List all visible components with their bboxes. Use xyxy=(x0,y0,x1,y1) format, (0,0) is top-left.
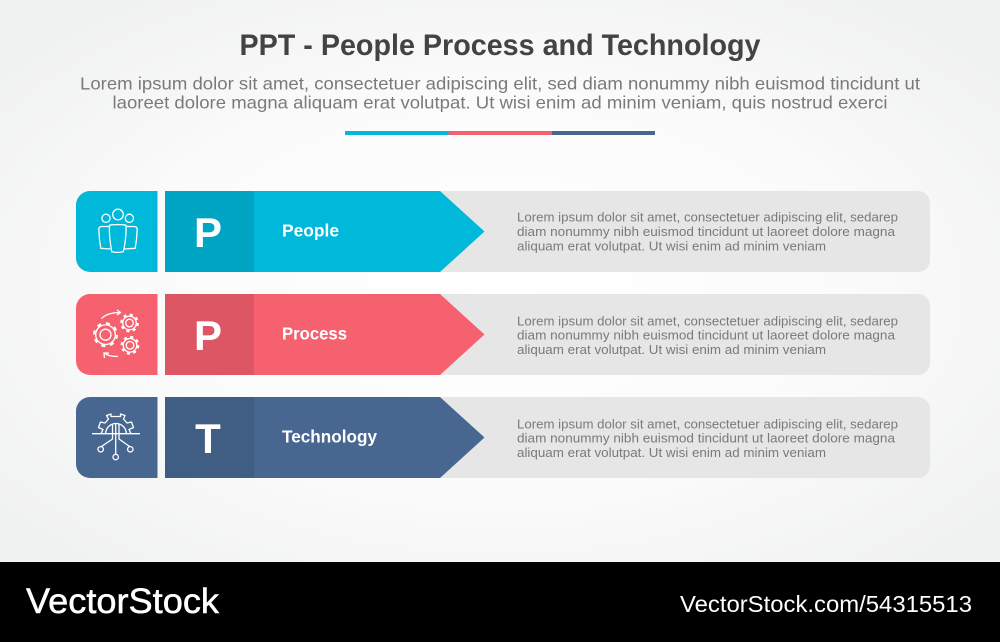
description: aliquam erat volutpat. Ut wisi enim ad minim veniam xyxy=(517,240,826,254)
letter: P xyxy=(194,312,222,359)
icon box xyxy=(76,191,158,272)
footer logo text: VectorStock xyxy=(26,582,220,621)
description: diam nonummy nibh euismod tincidunt ut laoreet dolore magna xyxy=(517,432,895,446)
letter: T xyxy=(195,415,221,462)
icon: gears and arrows xyxy=(94,310,138,358)
arrow xyxy=(165,294,484,375)
arrow xyxy=(165,191,484,272)
description panel xyxy=(165,191,930,272)
label: Technology xyxy=(282,426,377,446)
icon: gear with circuit xyxy=(92,414,140,460)
description: Lorem ipsum dolor sit amet, consectetuer adipiscing elit, sedarep xyxy=(517,314,898,328)
icon box xyxy=(76,397,158,478)
label: People xyxy=(282,220,339,240)
letter: P xyxy=(194,209,222,256)
description: Lorem ipsum dolor sit amet, consectetuer adipiscing elit, sedarep xyxy=(517,418,898,432)
arrow xyxy=(165,397,484,478)
subtitle text block: Lorem ipsum dolor sit amet, consectetuer adipiscing elit, sed diam nonummy nibh euismod tincidunt ut xyxy=(80,74,920,94)
letter tab xyxy=(165,294,254,375)
description: aliquam erat volutpat. Ut wisi enim ad minim veniam xyxy=(517,343,826,357)
icon box xyxy=(76,294,158,375)
description xyxy=(517,314,898,357)
description: diam nonummy nibh euismod tincidunt ut laoreet dolore magna xyxy=(517,225,895,239)
subtitle text block xyxy=(80,74,920,112)
description xyxy=(517,210,898,254)
label: Process xyxy=(282,324,347,344)
description: Lorem ipsum dolor sit amet, consectetuer adipiscing elit, sedarep xyxy=(517,210,898,224)
row: Technology xyxy=(76,397,930,478)
row: People xyxy=(76,191,930,272)
letter tab xyxy=(165,397,254,478)
title: PPT - People Process and Technology xyxy=(240,29,761,62)
description panel xyxy=(165,397,930,478)
title divider: three colours xyxy=(345,131,655,135)
description: aliquam erat volutpat. Ut wisi enim ad minim veniam xyxy=(517,446,826,460)
description: diam nonummy nibh euismod tincidunt ut laoreet dolore magna xyxy=(517,328,895,342)
description xyxy=(517,418,898,460)
description panel xyxy=(165,294,930,375)
letter tab xyxy=(165,191,254,272)
icon: people xyxy=(99,209,137,252)
footer bar xyxy=(0,562,1000,642)
subtitle text block: laoreet dolore magna aliquam erat volutpat. Ut wisi enim ad minim veniam, quis nostrud exerci xyxy=(112,92,888,112)
row: Process xyxy=(76,294,930,375)
footer url: VectorStock.com/54315513 xyxy=(680,591,972,617)
